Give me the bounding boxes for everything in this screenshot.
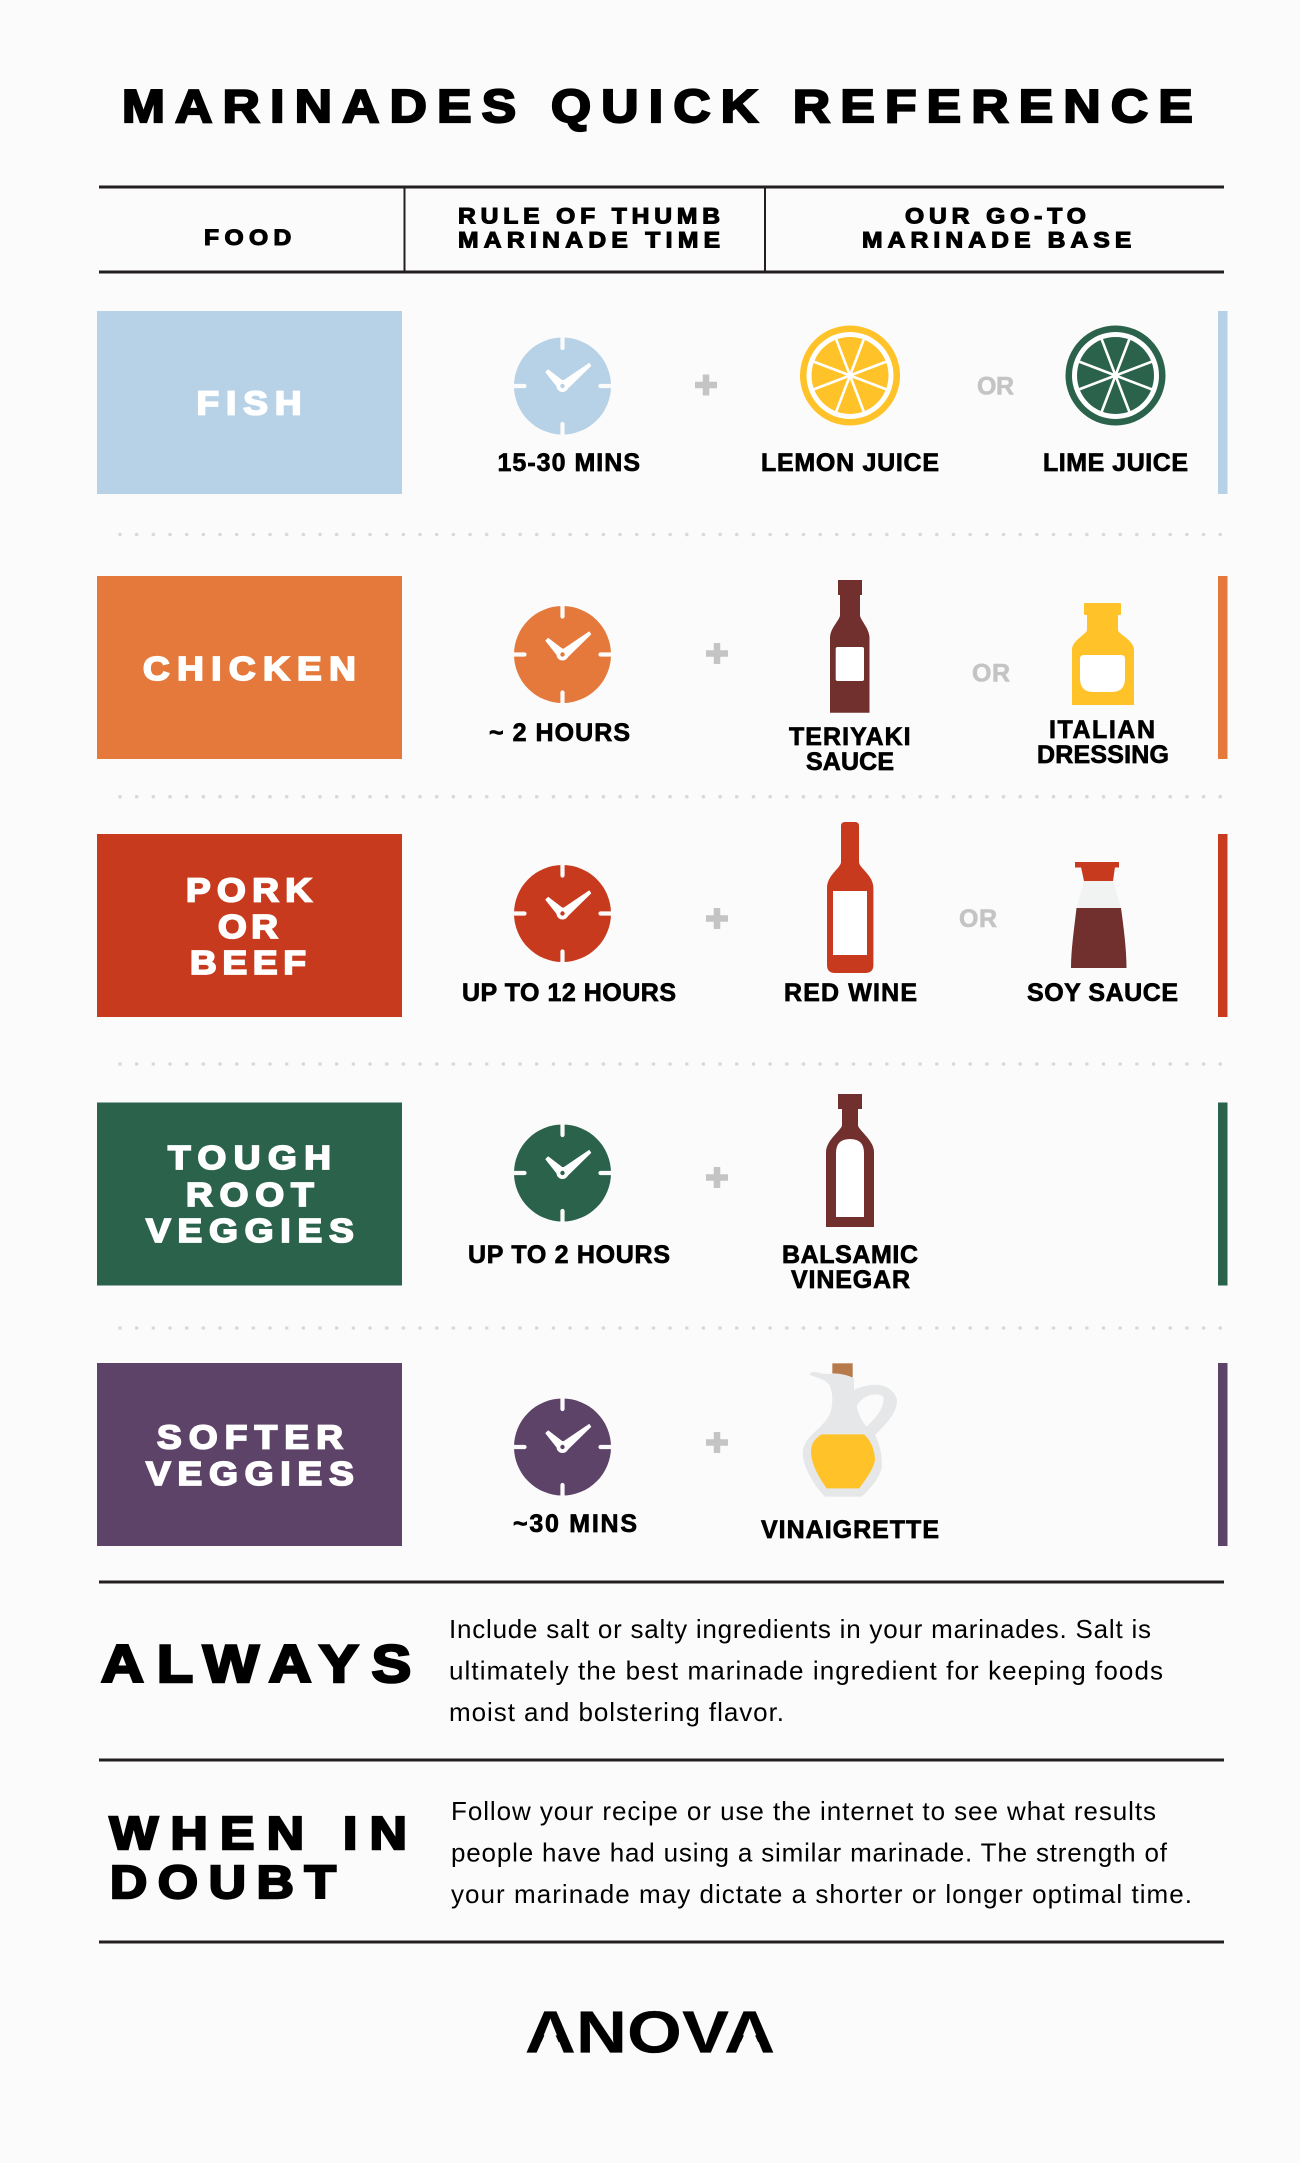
rule: [99, 1582, 1224, 1942]
pork or beef color panel: PORK: [186, 872, 312, 909]
tough root veggies color panel: TOUGH: [168, 1140, 331, 1177]
section: always: [101, 1614, 1163, 1727]
icon: plus: [706, 1432, 728, 1453]
tough root veggies accent bar: [1218, 1102, 1228, 1286]
icon: red wine bottle: [827, 822, 873, 973]
softer veggies color panel: SOFTER: [157, 1419, 343, 1456]
row: pork or beef: [97, 822, 1228, 1017]
pork or beef color panel: BEEF: [190, 945, 306, 982]
logo: Anova: ANOVA: [525, 1999, 775, 2065]
fish color panel: FISH: [196, 385, 302, 422]
teriyaki sauce label: TERIYAKI: [789, 723, 911, 751]
column heading: marinade time: [458, 204, 720, 252]
column heading: marinade base: [862, 204, 1131, 252]
tough root veggies color panel: [97, 1102, 402, 1286]
when in doubt body text: [451, 1796, 1192, 1909]
tough root veggies color panel: VEGGIES: [146, 1213, 354, 1250]
italian dressing label: [1037, 716, 1169, 769]
icon: clock: [512, 864, 612, 964]
teriyaki sauce label: SAUCE: [806, 748, 894, 776]
icon: clock: [512, 604, 612, 704]
pork or beef time label: UP TO 12 HOURS: [462, 979, 676, 1007]
vinaigrette label: VINAIGRETTE: [761, 1516, 939, 1544]
or: OR: [977, 372, 1014, 400]
teriyaki sauce label: [789, 723, 911, 776]
always body text: Include salt or salty ingredients in your marinades. Salt is: [449, 1614, 1151, 1644]
always heading: ALWAYS: [101, 1634, 411, 1693]
icon: plus: [706, 908, 728, 929]
row: softer veggies: [97, 1363, 1228, 1546]
icon: clock: [512, 1123, 612, 1223]
icon: plus: [695, 374, 717, 396]
icon: vinaigrette cruet: [803, 1363, 897, 1497]
icon: clock: [512, 336, 612, 436]
icon: teriyaki bottle: [830, 580, 870, 713]
when in doubt body text: people have had using a similar marinade. The strength of: [451, 1838, 1168, 1868]
balsamic vinegar label: BALSAMIC: [782, 1241, 918, 1269]
chicken color panel: [97, 576, 402, 759]
pork or beef accent bar: [1218, 834, 1228, 1017]
when in doubt heading: DOUBT: [110, 1857, 336, 1908]
fish time label: 15-30 MINS: [498, 449, 640, 477]
chicken time label: ~ 2 HOURS: [489, 719, 630, 747]
red wine label: RED WINE: [784, 979, 917, 1007]
column heading: marinade time: MARINADE TIME: [458, 228, 720, 252]
chicken accent bar: [1218, 576, 1228, 759]
icon: plus: [706, 1167, 728, 1188]
section: when in doubt: [110, 1796, 1192, 1909]
icon: balsamic vinegar bottle: [826, 1094, 874, 1227]
icon: italian dressing bottle: [1072, 603, 1134, 705]
always body text: [449, 1614, 1163, 1727]
icon: lime: [1066, 326, 1166, 426]
when in doubt heading: WHEN IN: [110, 1808, 407, 1859]
italian dressing label: ITALIAN: [1049, 716, 1155, 744]
column heading: food: FOOD: [204, 225, 291, 250]
column heading: marinade time: RULE OF THUMB: [458, 204, 720, 228]
tough root veggies time label: UP TO 2 HOURS: [468, 1241, 670, 1269]
always body text: moist and bolstering flavor.: [449, 1697, 784, 1727]
title: MARINADES QUICK REFERENCE: [122, 81, 1193, 132]
chicken color panel: CHICKEN: [143, 651, 356, 688]
softer veggies accent bar: [1218, 1363, 1228, 1546]
when in doubt body text: your marinade may dictate a shorter or longer optimal time.: [451, 1879, 1192, 1909]
table header: [99, 187, 1224, 272]
softer veggies time label: ~30 MINS: [513, 1510, 637, 1538]
icon: clock: [512, 1397, 612, 1497]
row: tough root veggies: [97, 1094, 1228, 1294]
tough root veggies color panel: ROOT: [186, 1177, 314, 1214]
lime juice label: LIME JUICE: [1043, 449, 1188, 477]
pork or beef color panel: [97, 834, 402, 1017]
row: chicken: [97, 576, 1228, 776]
balsamic vinegar label: VINEGAR: [791, 1266, 910, 1294]
lemon juice label: LEMON JUICE: [761, 449, 939, 477]
icon: plus: [706, 643, 728, 664]
balsamic vinegar label: [782, 1241, 918, 1294]
when in doubt heading: [110, 1808, 407, 1908]
pork or beef color panel: OR: [218, 909, 278, 946]
always body text: ultimately the best marinade ingredient for keeping foods: [449, 1656, 1163, 1686]
when in doubt body text: Follow your recipe or use the internet to see what results: [451, 1796, 1156, 1826]
row: fish: [97, 311, 1228, 494]
column heading: marinade base: OUR GO-TO: [905, 204, 1086, 228]
column heading: marinade base: MARINADE BASE: [862, 228, 1131, 252]
fish accent bar: [1218, 311, 1228, 494]
or: OR: [959, 905, 997, 933]
italian dressing label: DRESSING: [1037, 741, 1169, 769]
soy sauce label: SOY SAUCE: [1027, 979, 1178, 1007]
icon: soy sauce bottle: [1071, 862, 1126, 968]
softer veggies color panel: VEGGIES: [146, 1456, 354, 1493]
fish color panel: [97, 311, 402, 494]
or: OR: [972, 660, 1010, 688]
softer veggies color panel: [97, 1363, 402, 1546]
icon: lemon: [800, 326, 900, 426]
